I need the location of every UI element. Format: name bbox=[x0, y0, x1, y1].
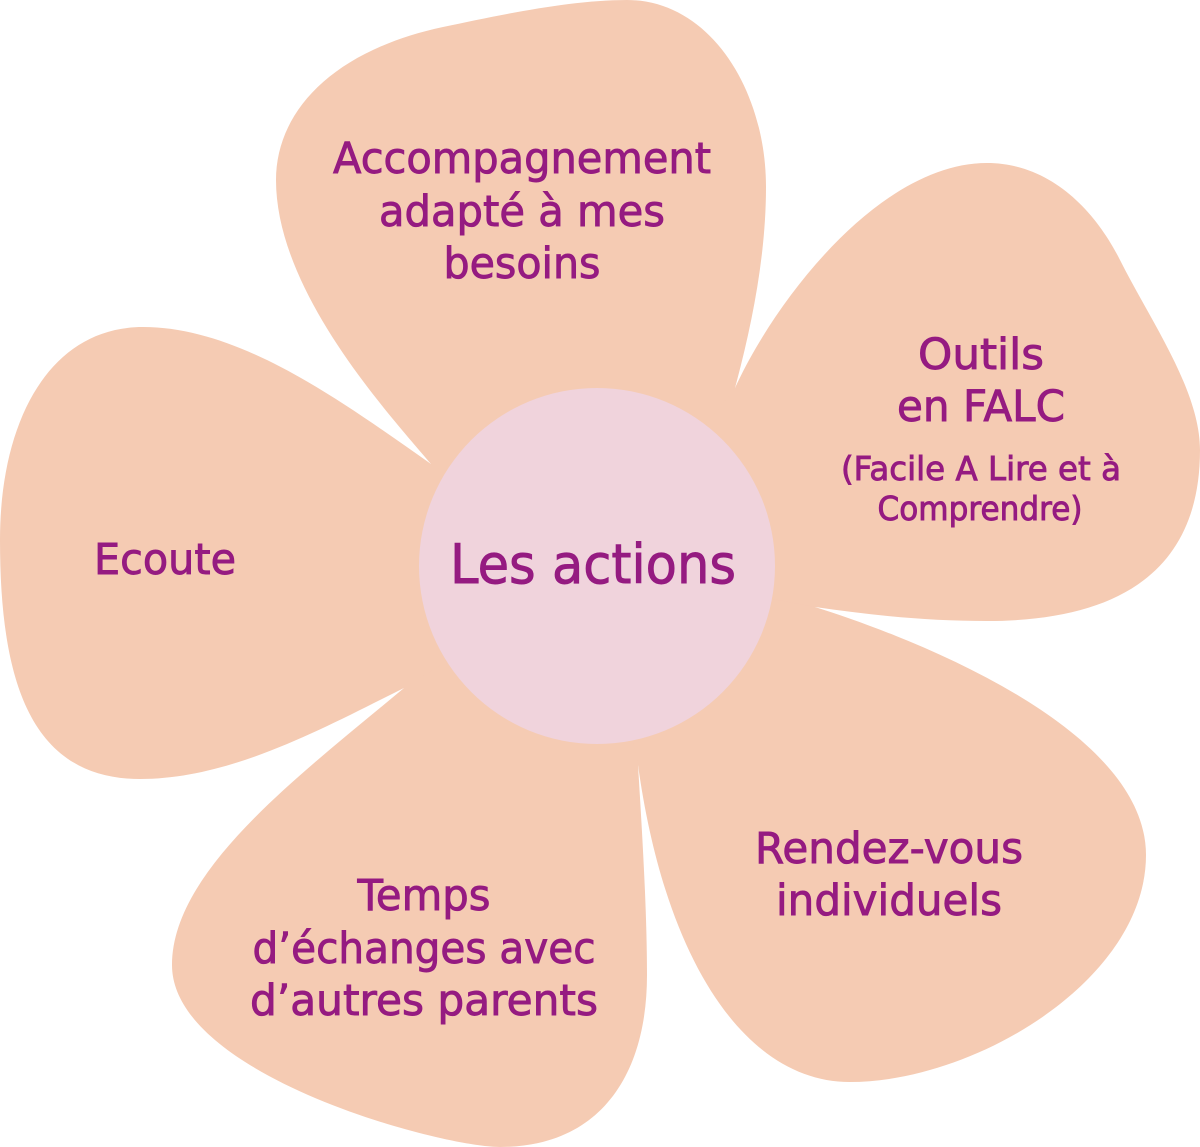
label: Accompagnement: Accompagnement bbox=[333, 134, 711, 184]
label: d'autres parents: d’autres parents bbox=[250, 976, 598, 1026]
label: besoins: besoins bbox=[444, 239, 600, 289]
centre circle bbox=[419, 388, 775, 744]
label: Outils: Outils bbox=[918, 330, 1044, 380]
label: individuels: individuels bbox=[776, 876, 1002, 926]
label: Comprendre: Comprendre) bbox=[878, 489, 1082, 528]
petal: Accompagnement bbox=[276, 0, 766, 566]
label: Facile A Lire et à: (Facile A Lire et à bbox=[841, 449, 1121, 488]
label: d'échanges avec: d’échanges avec bbox=[252, 924, 596, 974]
petal: Outils en FALC bbox=[597, 163, 1200, 621]
label: Temps: Temps bbox=[357, 871, 490, 921]
petal: Temps d'échanges bbox=[172, 566, 647, 1147]
petal: Rendez-vous individuels bbox=[597, 566, 1146, 1082]
petal: Ecoute bbox=[0, 327, 597, 779]
label: Ecoute: Ecoute bbox=[94, 535, 236, 585]
label: Rendez-vous: Rendez-vous bbox=[755, 824, 1023, 874]
centre label: Les actions bbox=[450, 533, 736, 596]
label: en FALC: en FALC bbox=[897, 382, 1065, 432]
label: adapté à mes: adapté à mes bbox=[379, 187, 665, 237]
